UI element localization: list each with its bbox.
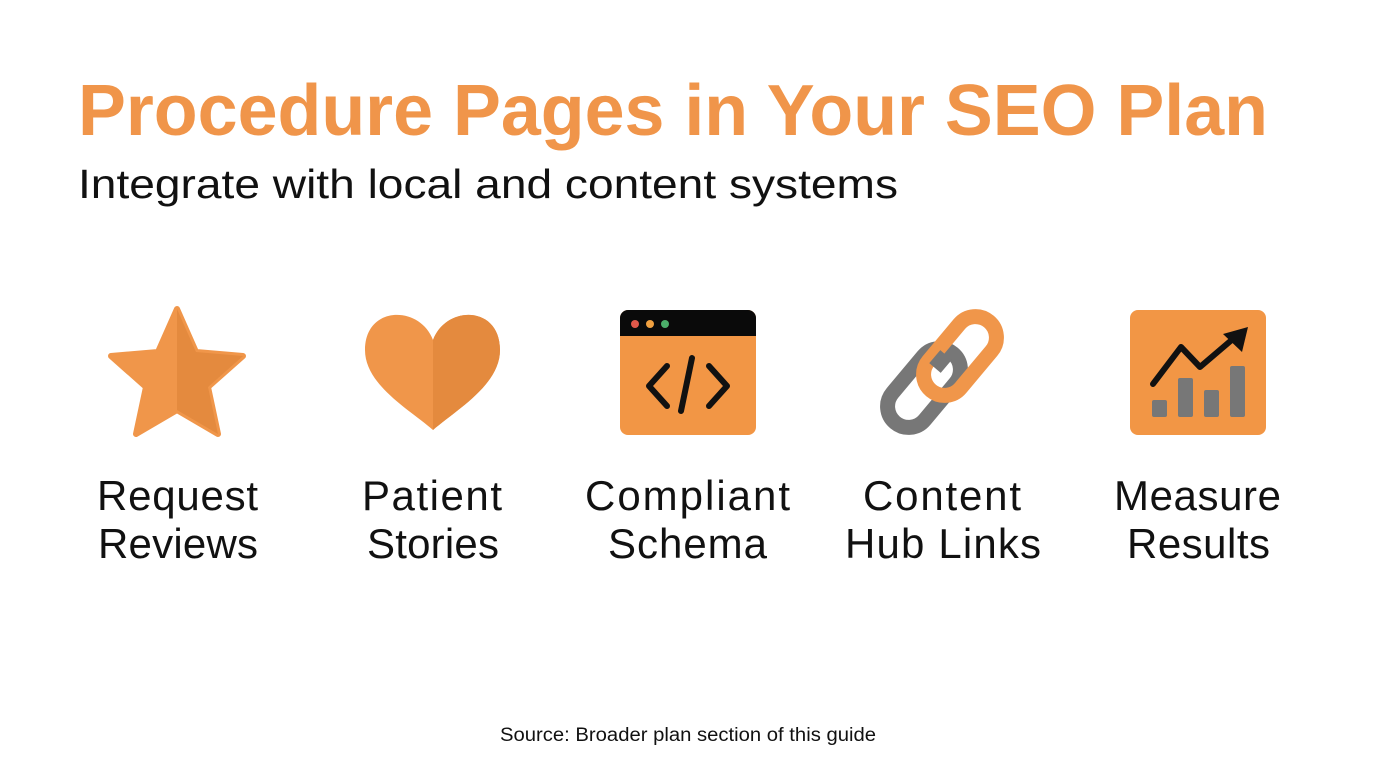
label: request reviews <box>97 472 258 567</box>
label: measure results: Measure <box>1114 472 1281 519</box>
source note: Source: Broader plan section of this guide <box>500 725 876 746</box>
label: patient stories: Patient <box>362 472 502 519</box>
label: compliant schema: Compliant <box>585 472 790 519</box>
icon: code browser <box>620 310 756 435</box>
label: measure results: Results <box>1127 520 1270 567</box>
label: content hub links <box>845 472 1041 567</box>
label: patient stories <box>362 472 502 567</box>
icon: heart <box>365 315 500 430</box>
label: content hub links: Hub Links <box>845 520 1041 567</box>
title: Procedure Pages in Your SEO Plan <box>78 71 1268 151</box>
label: request reviews: Reviews <box>98 520 258 567</box>
icon: chain link <box>879 308 1005 436</box>
icon: star <box>111 309 243 434</box>
label: compliant schema <box>585 472 790 567</box>
label: compliant schema: Schema <box>608 520 768 567</box>
labels <box>97 472 1281 567</box>
label: measure results <box>1114 472 1281 567</box>
label: content hub links: Content <box>863 472 1021 519</box>
label: patient stories: Stories <box>367 520 499 567</box>
label: request reviews: Request <box>97 472 258 519</box>
icon: growth chart <box>1130 310 1266 435</box>
subtitle: Integrate with local and content systems <box>78 161 898 207</box>
